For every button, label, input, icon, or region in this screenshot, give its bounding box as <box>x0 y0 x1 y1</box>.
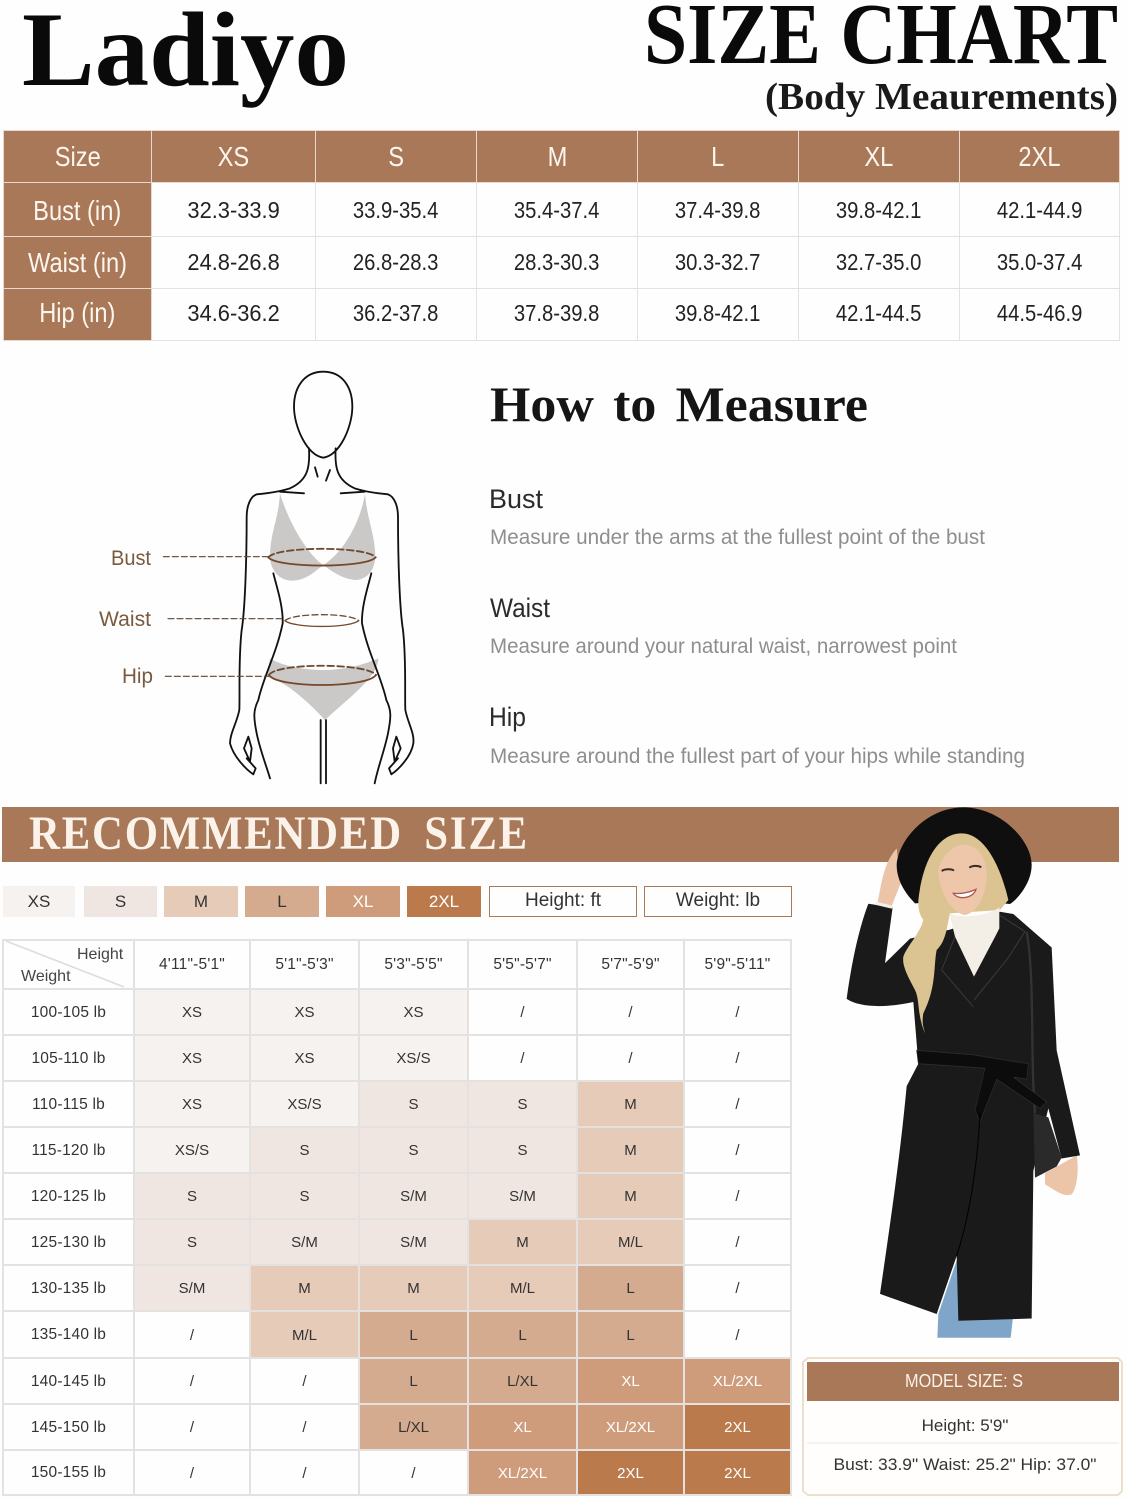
recommended size table: S <box>299 1142 310 1159</box>
recommended size table: 130-135 lb <box>31 1280 106 1296</box>
size table: 35.0-37.4 <box>997 249 1082 275</box>
raised hand <box>877 848 901 906</box>
size table: Waist (in) <box>28 246 127 278</box>
model size card <box>803 1358 1122 1495</box>
recommended size table: 135-140 lb <box>31 1326 106 1343</box>
head <box>294 372 352 458</box>
legend: L: L <box>277 892 287 911</box>
text block: bust <box>489 484 985 549</box>
recommended size table: L/XL <box>507 1373 538 1390</box>
recommended size table: XL/2XL <box>498 1464 547 1482</box>
size table: 42.1-44.9 <box>997 197 1082 223</box>
model photo: coat and lower body <box>847 904 1080 1338</box>
recommended size table: XL <box>513 1419 532 1436</box>
recommended size table: XS <box>403 1004 424 1021</box>
recommended size table: 145-150 lb <box>31 1418 106 1436</box>
legend: M <box>164 886 238 917</box>
text block: waist: Waist <box>490 593 550 623</box>
recommended size table: L <box>626 1280 635 1297</box>
recommended size table: S <box>299 1188 310 1205</box>
legend: weight in pounds: Weight: lb <box>676 890 760 911</box>
body measurement diagram <box>163 372 414 783</box>
size table: S <box>388 141 404 172</box>
recommended size table: S/M <box>400 1234 427 1251</box>
recommended size table: / <box>302 1373 307 1390</box>
recommended size table: 120-125 lb <box>31 1188 106 1204</box>
recommended size table: XS <box>294 1050 314 1067</box>
recommended size table: XS/S <box>175 1142 209 1159</box>
recommended size table: 115-120 lb <box>31 1142 106 1158</box>
recommended size table: / <box>735 1188 740 1205</box>
recommended size table: S/M <box>179 1280 205 1297</box>
size table: Hip (in) <box>39 297 116 328</box>
model photo: head and shoulders <box>875 807 1032 1033</box>
recommended size table: 110-115 lb <box>32 1096 105 1112</box>
coat <box>847 904 1080 1321</box>
recommended size table: / <box>190 1373 194 1390</box>
size table: 32.7-35.0 <box>836 249 922 275</box>
recommended size table: / <box>735 1280 740 1297</box>
size table: 37.4-39.8 <box>675 197 761 223</box>
size table: 44.5-46.9 <box>997 300 1082 326</box>
text block: waist <box>490 593 957 658</box>
banner: recommended size <box>2 807 1119 862</box>
table corner header <box>6 941 124 987</box>
recommended size table: / <box>735 1326 740 1344</box>
heading: how to measure: How to Measure <box>490 376 868 432</box>
recommended size table: / <box>735 1234 740 1251</box>
legend: XL <box>326 886 400 917</box>
recommended size table: S <box>517 1142 528 1159</box>
recommended size table: M <box>624 1096 637 1113</box>
recommended size table: M <box>298 1280 311 1297</box>
recommended size table: XL/2XL <box>606 1419 655 1436</box>
legend: XS <box>3 886 75 917</box>
face <box>938 845 987 915</box>
hip tape <box>269 666 376 685</box>
recommended size table: L <box>409 1373 418 1390</box>
recommended size table: 4'11"-5'1" <box>159 956 225 973</box>
legend: height in feet: Height: ft <box>525 890 601 911</box>
bust tape <box>268 549 376 566</box>
recommended size table: / <box>190 1419 194 1436</box>
model size card: Bust: 33.9" Waist: 25.2" Hip: 37.0" <box>834 1455 1096 1474</box>
left body outline <box>230 448 318 778</box>
lapels <box>942 915 1025 1007</box>
recommended size table: S/M <box>400 1188 427 1205</box>
size table: XS <box>218 141 249 172</box>
eyes <box>942 866 981 871</box>
recommended size table: M/L <box>510 1280 535 1297</box>
recommended size table: 5'5"-5'7" <box>493 956 552 973</box>
recommended size table: 105-110 lb <box>31 1050 106 1066</box>
recommended size table: / <box>628 1050 633 1067</box>
recommended size table: S <box>187 1234 197 1251</box>
recommended size table: S <box>517 1096 528 1113</box>
recommended size table: / <box>411 1464 416 1482</box>
recommended size table: S <box>408 1096 418 1113</box>
recommended size table: XL/2XL <box>713 1373 762 1390</box>
legend: M: M <box>194 892 208 911</box>
size table: 42.1-44.5 <box>836 300 922 326</box>
recommended size table: XL <box>621 1373 640 1390</box>
recommended size table: / <box>302 1419 307 1436</box>
size table: 26.8-28.3 <box>353 249 439 275</box>
legend: 2XL <box>407 886 481 917</box>
underwear shape <box>267 658 378 720</box>
recommended size table: / <box>520 1050 525 1067</box>
size table: 28.3-30.3 <box>514 249 600 275</box>
recommended size table: L <box>626 1326 635 1344</box>
recommended size table: 2XL <box>617 1464 644 1482</box>
text block: hip: Measure around the fullest part of your hips while standing <box>490 745 1025 768</box>
size table: 39.8-42.1 <box>675 300 761 326</box>
legend: height in feet <box>489 886 637 917</box>
recommended size table: S/M <box>509 1188 536 1205</box>
size table: 36.2-37.8 <box>353 300 439 326</box>
diagram label: hip: Hip <box>122 665 153 688</box>
legend: S: S <box>115 892 126 911</box>
bag strap <box>1027 932 1035 1113</box>
size table: Size <box>54 141 101 172</box>
recommended size table: M <box>407 1280 420 1297</box>
legend: weight in pounds <box>644 886 792 917</box>
size table: XL <box>865 141 893 172</box>
recommended size table: 5'3"-5'5" <box>384 956 443 973</box>
recommended size table: M/L <box>618 1234 643 1251</box>
size table: L <box>711 141 725 172</box>
recommended size table: 2XL <box>724 1419 751 1436</box>
recommended size table: M <box>516 1234 529 1251</box>
recommended size table: S <box>408 1142 418 1159</box>
legend: XL: XL <box>353 892 373 911</box>
model size card: Height: 5'9" <box>922 1416 1008 1435</box>
recommended size table: S/M <box>291 1234 318 1251</box>
size table: 30.3-32.7 <box>675 249 761 275</box>
hat <box>897 807 1032 904</box>
size table: 2XL <box>1018 141 1061 172</box>
handbag <box>1033 1113 1062 1178</box>
size table: 33.9-35.4 <box>353 197 439 223</box>
text block: bust: Bust <box>489 484 543 514</box>
dashed leader lines <box>163 557 283 676</box>
recommended size table: XS <box>182 1096 202 1113</box>
recommended size table <box>2 939 792 1496</box>
recommended size table: / <box>628 1004 633 1021</box>
recommended size table: L <box>518 1326 527 1344</box>
cuff <box>875 902 893 909</box>
recommended size table: XS <box>182 1004 202 1021</box>
recommended size table: / <box>190 1464 194 1482</box>
belt <box>917 1050 1047 1122</box>
recommended size table: / <box>735 1004 740 1021</box>
size table: 37.8-39.8 <box>514 300 600 326</box>
jeans <box>937 1256 1013 1338</box>
recommended size table: / <box>735 1142 740 1159</box>
legend: 2XL: 2XL <box>429 892 459 911</box>
table corner header: Height <box>77 946 124 963</box>
recommended size table: XS/S <box>396 1050 431 1067</box>
recommended size table: L <box>409 1326 418 1344</box>
recommended size table: 100-105 lb <box>31 1004 106 1020</box>
recommended size table: XS <box>182 1050 202 1067</box>
recommended size table: 5'9"-5'11" <box>704 956 771 973</box>
recommended size table: XS/S <box>287 1096 322 1113</box>
lower hand <box>1045 1155 1078 1195</box>
subtitle: body measurements: (Body Meaurements) <box>765 76 1118 118</box>
banner: recommended size: RECOMMENDED SIZE <box>29 807 529 860</box>
recommended size table: M/L <box>292 1326 317 1344</box>
diagram label: bust: Bust <box>111 547 151 570</box>
size table <box>3 130 1120 341</box>
size table: Bust (in) <box>33 194 122 226</box>
legs <box>321 720 326 783</box>
recommended size table: L/XL <box>398 1419 429 1436</box>
recommended size table: S <box>187 1188 197 1205</box>
size table: 34.6-36.2 <box>187 300 280 326</box>
recommended size table: / <box>302 1464 307 1482</box>
smile <box>953 889 976 898</box>
text block: waist: Measure around your natural waist, narrowest point <box>490 635 957 658</box>
turtleneck <box>949 907 999 977</box>
waist tape <box>285 615 359 626</box>
recommended size table: / <box>735 1050 740 1067</box>
legend: XS: XS <box>28 892 50 911</box>
size table: 32.3-33.9 <box>187 197 280 223</box>
diagram label: waist: Waist <box>99 608 151 631</box>
recommended size table: 5'7"-5'9" <box>601 956 660 973</box>
text block: hip: Hip <box>489 702 526 732</box>
coat opening <box>957 1113 980 1256</box>
model size card: MODEL SIZE: S <box>905 1371 1023 1391</box>
recommended size table: 5'1"-5'3" <box>275 956 334 973</box>
recommended size table: M <box>624 1188 637 1205</box>
legend: S <box>84 886 157 917</box>
size table: 39.8-42.1 <box>836 197 922 223</box>
recommended size table: 150-155 lb <box>31 1464 106 1481</box>
recommended size table: / <box>735 1096 740 1113</box>
bra shape <box>270 493 375 581</box>
recommended size table: XS <box>294 1004 314 1021</box>
size table: M <box>547 141 567 172</box>
table corner header: Weight <box>21 968 71 985</box>
recommended size table: / <box>520 1004 525 1021</box>
recommended size table: M <box>624 1142 637 1159</box>
recommended size table: 125-130 lb <box>31 1234 106 1250</box>
size table: 35.4-37.4 <box>514 197 600 223</box>
recommended size table: / <box>190 1326 194 1344</box>
size table: 24.8-26.8 <box>187 249 280 275</box>
text block: hip <box>489 702 1025 768</box>
recommended size table: 2XL <box>724 1464 751 1482</box>
legend: L <box>245 886 319 917</box>
right body outline <box>326 448 414 783</box>
hair <box>903 833 1008 1033</box>
recommended size table: 140-145 lb <box>31 1372 106 1390</box>
text block: bust: Measure under the arms at the fullest point of the bust <box>490 526 985 549</box>
